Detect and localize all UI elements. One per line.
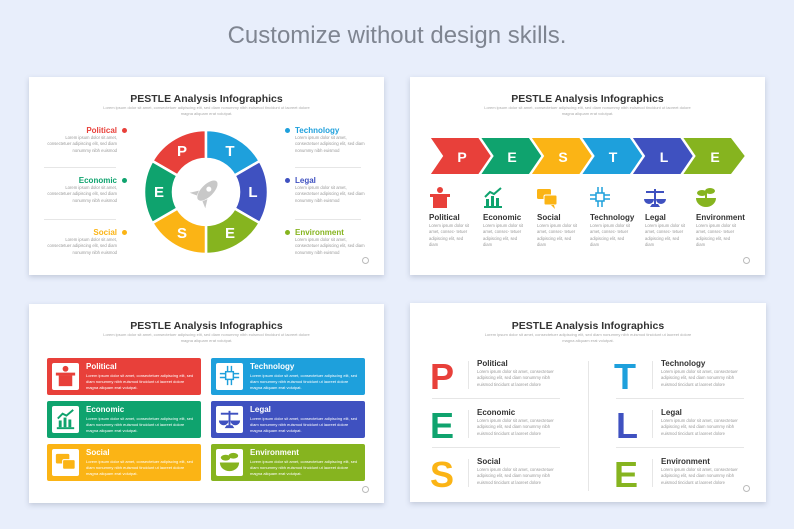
box: Economic: Lorem ipsum dolor sit amet, consectetuer adipiscing elit, sed diam nonummy nibh euismod tincidunt ut laoreet dolore magna aliquam erat volutpat. xyxy=(86,416,193,433)
wheel chart: T xyxy=(225,143,235,160)
labels row: Lorem ipsum dolor sit amet, consec- tetuer adipiscing elit, sed diam xyxy=(645,223,685,247)
letter item: Legal: Legal xyxy=(661,408,682,417)
heading: Customize without design skills. xyxy=(228,22,566,49)
item: Legal: Lorem ipsum dolor sit amet, consectetuer adipiscing elit, sed diam nonummy nibh euismod xyxy=(295,185,365,203)
icon: chat xyxy=(537,189,557,209)
letter item: Technology: T xyxy=(614,356,636,397)
item: Technology xyxy=(295,126,365,153)
subtitle: Lorem ipsum dolor sit amet, consectetuer adipiscing elit, sed diam nonummy nibh euismod tincidunt ut laoreet dolore magna aliquam erat volutpat. xyxy=(103,332,310,343)
box: Legal: Legal xyxy=(250,405,271,414)
icon: chart xyxy=(484,188,502,208)
letter item: Legal: Lorem ipsum dolor sit amet, consectetuer adipiscing elit, sed diam nonummy nibh euismod tincidunt ut laoreet dolore xyxy=(661,418,738,436)
item: Social xyxy=(47,228,117,255)
labels row xyxy=(429,213,745,247)
item: Social: Social xyxy=(93,228,117,237)
item: Legal xyxy=(295,176,365,203)
letter item: Political: Political xyxy=(477,359,508,368)
box: Economic xyxy=(47,401,201,438)
item: Economic: Lorem ipsum dolor sit amet, consectetuer adipiscing elit, sed diam nonummy nibh euismod xyxy=(47,185,117,203)
title: PESTLE Analysis Infographics xyxy=(130,93,283,105)
letter item: Environment: Environment xyxy=(661,457,710,466)
item: Economic xyxy=(47,176,117,203)
letter item: Economic: E xyxy=(430,405,454,446)
wheel chart: E xyxy=(225,225,235,242)
item: Environment xyxy=(295,228,365,255)
chevron row xyxy=(430,138,745,209)
chevron row: E xyxy=(710,149,720,165)
subtitle: Lorem ipsum dolor sit amet, consectetuer adipiscing elit, sed diam nonummy nibh euismod tincidunt ut laoreet dolore magna aliquam erat volutpat. xyxy=(485,332,691,343)
letter item: Legal: L xyxy=(616,405,638,446)
letter item: Social: S xyxy=(430,454,454,495)
letter item: Political: P xyxy=(430,356,454,397)
item: Legal: Legal xyxy=(295,176,316,185)
item: Environment: Environment xyxy=(295,228,344,237)
chevron row: E xyxy=(507,149,517,165)
letter item: Technology: Technology xyxy=(661,359,705,368)
letter item: Social xyxy=(430,454,554,495)
item: Environment: Lorem ipsum dolor sit amet, consectetuer adipiscing elit, sed diam nonummy nibh euismod xyxy=(295,237,365,255)
letter item: Environment xyxy=(614,454,738,495)
item: Technology: Lorem ipsum dolor sit amet, consectetuer adipiscing elit, sed diam nonummy nibh euismod xyxy=(295,135,365,153)
icon: scales xyxy=(644,189,666,207)
box: Social: Lorem ipsum dolor sit amet, consectetuer adipiscing elit, sed diam nonummy nibh euismod tincidunt ut laoreet dolore magna aliquam erat volutpat. xyxy=(86,459,193,476)
labels row: Social xyxy=(537,213,561,222)
letter item: Technology: Lorem ipsum dolor sit amet, consectetuer adipiscing elit, sed diam nonummy nibh euismod tincidunt ut laoreet dolore xyxy=(661,369,738,387)
box: Technology xyxy=(211,358,365,395)
labels row: Lorem ipsum dolor sit amet, consec- tetuer adipiscing elit, sed diam xyxy=(537,223,577,247)
wheel chart: P xyxy=(177,143,187,160)
letter item: Environment: Lorem ipsum dolor sit amet, consectetuer adipiscing elit, sed diam nonummy nibh euismod tincidunt ut laoreet dolore xyxy=(661,467,738,485)
box: Environment: Lorem ipsum dolor sit amet, consectetuer adipiscing elit, sed diam nonummy nibh euismod tincidunt ut laoreet dolore magna aliquam erat volutpat. xyxy=(250,459,357,476)
chevron row: T xyxy=(609,149,618,165)
wheel chart: S xyxy=(177,225,187,242)
item: Economic: Economic xyxy=(79,176,117,185)
chevron row: P xyxy=(457,149,467,165)
letter item: Economic: Economic xyxy=(477,408,515,417)
box: Legal xyxy=(211,401,365,438)
letter item: Environment: E xyxy=(614,454,638,495)
wheel chart: E xyxy=(154,184,164,201)
letter item: Political xyxy=(430,356,554,397)
title: PESTLE Analysis Infographics xyxy=(511,93,664,105)
wheel chart xyxy=(145,131,267,253)
box: Political: Political xyxy=(86,362,117,371)
icon: podium xyxy=(430,187,450,208)
item: Political: Lorem ipsum dolor sit amet, consectetuer adipiscing elit, sed diam nonummy nibh euismod xyxy=(47,135,117,153)
box: Economic: Economic xyxy=(86,405,124,414)
panel: letters xyxy=(410,303,766,502)
labels row: Lorem ipsum dolor sit amet, consec- tetuer adipiscing elit, sed diam xyxy=(696,223,736,247)
box: Environment xyxy=(211,444,365,481)
icon: chip xyxy=(590,187,610,207)
letter item: Legal xyxy=(616,405,738,446)
letter item: Social: Social xyxy=(477,457,501,466)
box: Environment: Environment xyxy=(250,448,299,457)
panel: chevrons xyxy=(410,77,765,275)
labels row: Economic xyxy=(483,213,521,222)
item: Political xyxy=(47,126,117,153)
chevron row: L xyxy=(660,149,669,165)
labels row: Technology xyxy=(590,213,634,222)
letter item: Technology xyxy=(614,356,738,397)
item: Social: Lorem ipsum dolor sit amet, consectetuer adipiscing elit, sed diam nonummy nibh euismod xyxy=(47,237,117,255)
letter item: Social: Lorem ipsum dolor sit amet, consectetuer adipiscing elit, sed diam nonummy nibh euismod tincidunt ut laoreet dolore xyxy=(477,467,554,485)
box: Legal: Lorem ipsum dolor sit amet, consectetuer adipiscing elit, sed diam nonummy nibh euismod tincidunt ut laoreet dolore magna aliquam erat volutpat. xyxy=(250,416,357,433)
box: Social xyxy=(47,444,201,481)
title: PESTLE Analysis Infographics xyxy=(512,320,664,332)
box: Technology: Lorem ipsum dolor sit amet, consectetuer adipiscing elit, sed diam nonummy nibh euismod tincidunt ut laoreet dolore magna aliquam erat volutpat. xyxy=(250,373,357,390)
box: Political: Lorem ipsum dolor sit amet, consectetuer adipiscing elit, sed diam nonummy nibh euismod tincidunt ut laoreet dolore magna aliquam erat volutpat. xyxy=(86,373,193,390)
icon: plant xyxy=(696,188,716,207)
item: Political: Political xyxy=(86,126,117,135)
box: Technology: Technology xyxy=(250,362,294,371)
subtitle: Lorem ipsum dolor sit amet, consectetuer adipiscing elit, sed diam nonummy nibh euismod tincidunt ut laoreet dolore magna aliquam erat volutpat. xyxy=(103,105,310,116)
labels row: Lorem ipsum dolor sit amet, consec- tetuer adipiscing elit, sed diam xyxy=(429,223,469,247)
icon: rocket xyxy=(190,174,224,208)
box: Social: Social xyxy=(86,448,110,457)
labels row: Environment xyxy=(696,213,745,222)
letter item: Political: Lorem ipsum dolor sit amet, consectetuer adipiscing elit, sed diam nonummy nibh euismod tincidunt ut laoreet dolore xyxy=(477,369,554,387)
chevron row: S xyxy=(558,149,568,165)
item: Technology: Technology xyxy=(295,126,339,135)
wheel chart: L xyxy=(248,184,258,201)
labels row: Political xyxy=(429,213,460,222)
subtitle: Lorem ipsum dolor sit amet, consectetuer adipiscing elit, sed diam nonummy nibh euismod tincidunt ut laoreet dolore magna aliquam erat volutpat. xyxy=(484,105,691,116)
labels row: Lorem ipsum dolor sit amet, consec- tetuer adipiscing elit, sed diam xyxy=(590,223,630,247)
letter item: Economic: Lorem ipsum dolor sit amet, consectetuer adipiscing elit, sed diam nonummy nibh euismod tincidunt ut laoreet dolore xyxy=(477,418,554,436)
box: Political xyxy=(47,358,201,395)
letter item: Economic xyxy=(430,405,554,446)
title: PESTLE Analysis Infographics xyxy=(130,320,283,332)
labels row: Legal xyxy=(645,213,666,222)
panel: wheel xyxy=(29,77,384,275)
panel: boxes xyxy=(29,304,384,503)
labels row: Lorem ipsum dolor sit amet, consec- tetuer adipiscing elit, sed diam xyxy=(483,223,523,247)
